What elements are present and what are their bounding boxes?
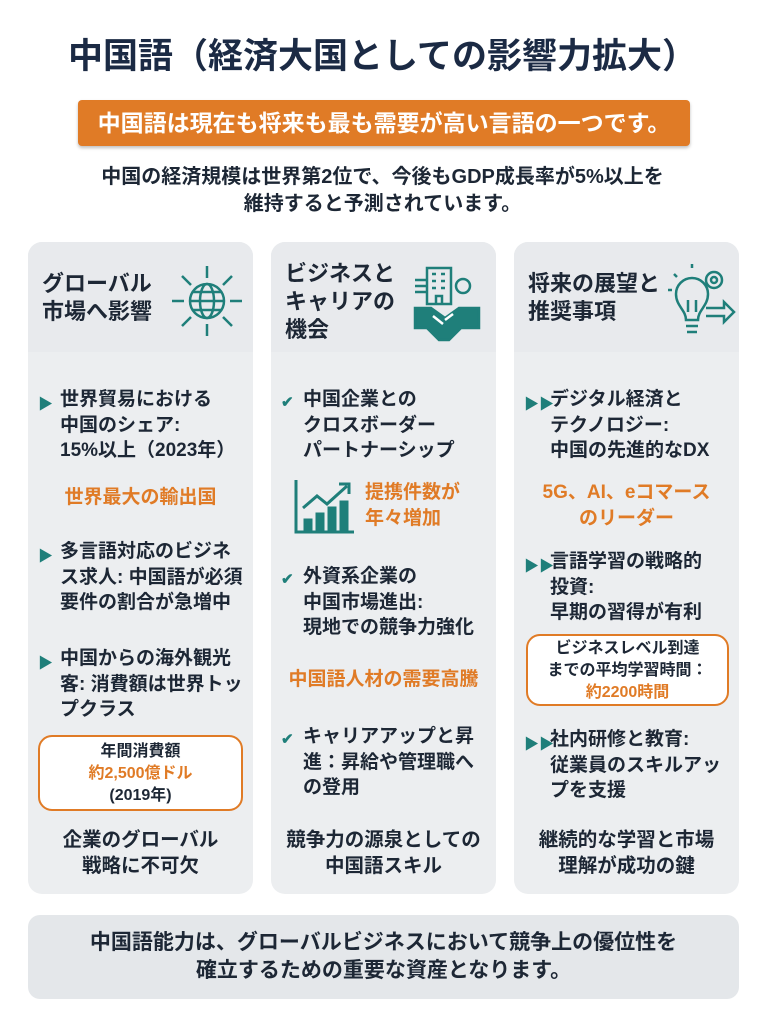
footer text (63, 829, 218, 877)
footer text: 理解が成功の鍵 (558, 855, 695, 877)
icon: globe (172, 266, 242, 336)
heading (42, 271, 152, 324)
panel: business: クロスボーダー (303, 414, 436, 436)
footer text: 企業のグローバル (63, 829, 218, 851)
highlight: 世界最大の輸出国 (64, 487, 216, 508)
callout: までの平均学習時間： (547, 662, 708, 679)
banner (78, 100, 690, 146)
panel: global market: ス求人: 中国語が必須 (60, 566, 243, 588)
callout (38, 735, 243, 811)
highlight: のリーダー (579, 508, 674, 529)
item 3: ▶ (38, 655, 53, 672)
heading: 機会 (285, 317, 329, 342)
footer text: 中国語スキル (325, 855, 442, 877)
callout (526, 634, 729, 706)
panel: future: 従業員のスキルアッ (550, 754, 721, 776)
highlight: 中国語人材の需要高騰 (288, 669, 478, 690)
item 1: ✔ (281, 394, 294, 411)
icon: lightbulb gear (668, 264, 736, 334)
bottom summary: 中国語能力は、グローバルビジネスにおいて競争上の優位性を (90, 931, 677, 954)
highlight: 年々増加 (365, 508, 441, 529)
panel: future: 早期の習得が有利 (550, 602, 702, 623)
panel: business: パートナーシップ (303, 440, 455, 461)
panel: business: 中国企業との (303, 389, 417, 410)
item 2: ▶▶ (524, 558, 554, 575)
footer text: 競争力の源泉としての (286, 829, 481, 851)
icon: chart (294, 480, 354, 534)
callout: ビジネスレベル到達 (555, 640, 700, 657)
item 2: ▶ (38, 548, 53, 565)
footer text: 戦略に不可欠 (82, 855, 199, 877)
panel: future: 投資: (550, 576, 594, 598)
panel: global market: 中国のシェア: (60, 414, 180, 436)
panel: future: デジタル経済と (550, 389, 683, 410)
item 2: ✔ (281, 571, 294, 588)
panel: future (514, 242, 739, 894)
panel: global market: プクラス (60, 699, 136, 720)
heading: グローバル (42, 271, 152, 296)
panel: business: 進：昇給や管理職へ (303, 752, 474, 772)
item 1: ▶ (38, 396, 53, 413)
panel: business: の登用 (303, 777, 360, 798)
panel: business (271, 242, 496, 894)
panel: business: キャリアアップと昇 (303, 726, 474, 747)
item 1: ▶▶ (524, 396, 554, 413)
heading (528, 271, 660, 324)
bottom summary (28, 915, 739, 999)
panel: future: テクノロジー: (550, 414, 669, 436)
panel: future: 言語学習の戦略的 (550, 551, 702, 572)
panel: future: 中国の先進的なDX (550, 440, 709, 461)
panel: global market: 中国からの海外観光 (60, 648, 231, 669)
highlight (543, 482, 710, 529)
callout: (2019年) (109, 787, 172, 804)
panel: business: 現地での競争力強化 (303, 617, 474, 638)
callout: 約2200時間 (586, 684, 669, 701)
heading: 推奨事項 (528, 299, 616, 324)
item 3: ✔ (281, 731, 294, 748)
heading: 将来の展望と (528, 271, 660, 296)
subtitle: 中国の経済規模は世界第2位で、今後もGDP成長率が5%以上を (101, 166, 664, 188)
highlight: 5G、AI、eコマース (543, 482, 710, 503)
panel: business: 中国市場進出: (303, 592, 423, 612)
panel: global market: 世界貿易における (60, 389, 212, 410)
panel: future: 社内研修と教育: (550, 729, 689, 750)
highlight: 提携件数が (365, 482, 460, 503)
heading: ビジネスと (285, 261, 395, 286)
footer text (286, 829, 481, 877)
subtitle: 維持すると予測されています。 (244, 193, 521, 215)
heading: キャリアの (285, 289, 395, 314)
panel: business: 外資系企業の (303, 566, 417, 587)
heading (285, 261, 395, 342)
title: 中国語（経済大国としての影響力拡大） (68, 37, 697, 76)
callout: 年間消費額 (100, 743, 180, 760)
panel: global market: 15%以上（2023年） (60, 440, 235, 461)
item 3: ▶▶ (524, 736, 554, 753)
highlight (365, 482, 460, 529)
subtitle (101, 166, 664, 215)
panel: global market: 多言語対応のビジネ (60, 541, 231, 562)
heading: 市場へ影響 (42, 299, 152, 324)
footer text: 継続的な学習と市場 (539, 829, 714, 851)
panel: global market: 客: 消費額は世界トッ (60, 674, 243, 694)
footer text (539, 829, 714, 877)
icon: building handshake (414, 266, 480, 342)
banner: 中国語は現在も将来も最も需要が高い言語の一つです。 (98, 110, 670, 136)
callout: 約2,500億ドル (88, 765, 193, 782)
panel: global market (28, 242, 253, 894)
panel: future: プを支援 (550, 780, 626, 801)
panel: global market: 要件の割合が急増中 (60, 592, 231, 613)
bottom summary: 確立するための重要な資産となります。 (196, 959, 571, 982)
